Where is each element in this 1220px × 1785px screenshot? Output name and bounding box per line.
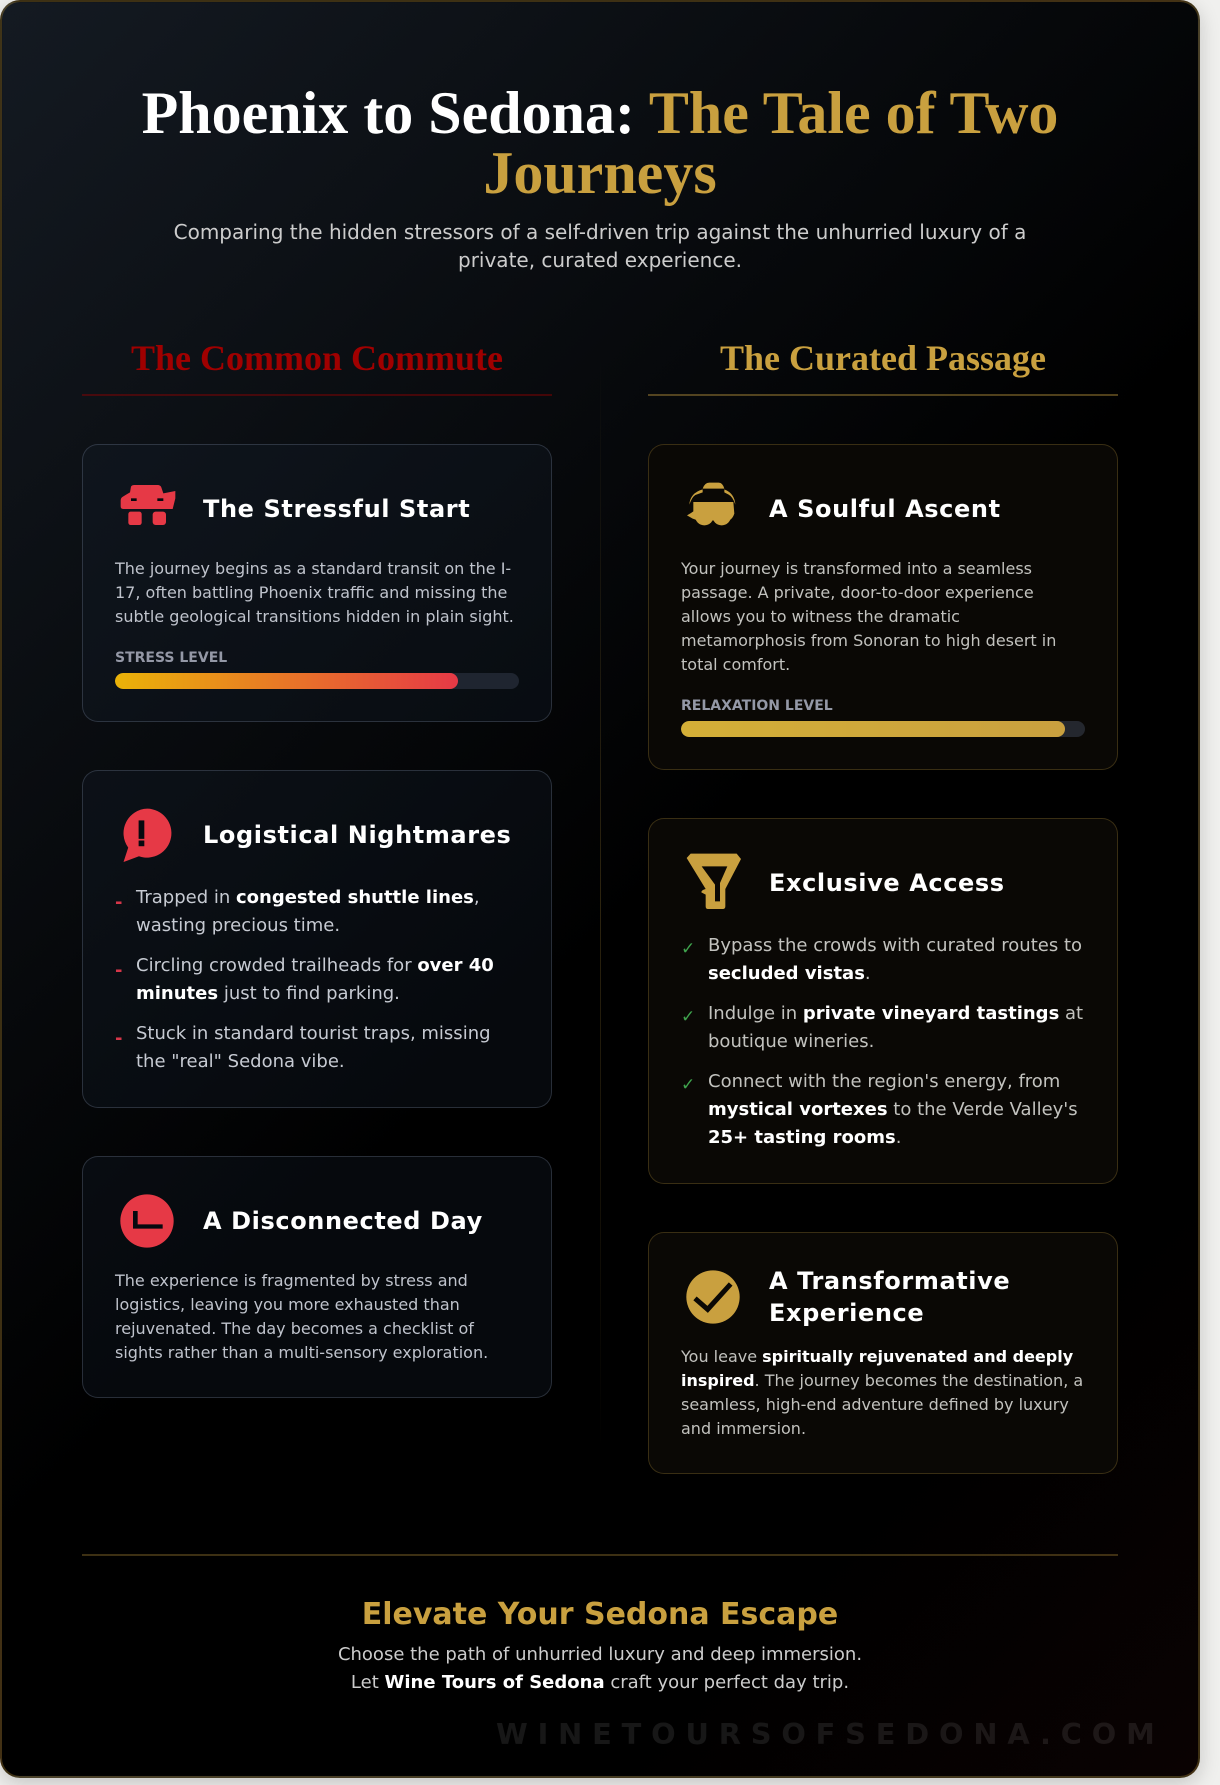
title: Phoenix to Sedona: The Tale of Two <box>142 80 1058 146</box>
card text: and immersion. <box>681 1419 806 1438</box>
card text: The journey begins as a standard transit on the I- <box>115 559 511 578</box>
bullet list: - <box>115 1028 122 1049</box>
check list <box>681 935 1083 1148</box>
card text: You leave spiritually rejuvenated and deeply <box>681 1347 1073 1366</box>
icon: funnel <box>686 854 741 909</box>
relaxation level bar <box>681 721 1085 737</box>
card title: Exclusive Access <box>769 869 1005 897</box>
bullet list: Circling crowded trailheads for over 40 <box>136 955 494 976</box>
check list: ✓ <box>681 1007 695 1027</box>
card text <box>114 1271 488 1362</box>
stress level bar <box>115 673 519 689</box>
column heading: the common commute <box>82 336 552 396</box>
bullet list: minutes just to find parking. <box>136 983 400 1004</box>
icon: clock <box>120 1194 174 1248</box>
check list: boutique wineries. <box>708 1031 874 1052</box>
bullet list: Stuck in standard tourist traps, missing <box>136 1023 491 1044</box>
card title: The Stressful Start <box>203 495 470 523</box>
card text: passage. A private, door-to-door experience <box>681 583 1034 602</box>
card text: seamless, high-end adventure defined by luxury <box>681 1395 1069 1414</box>
icon: car <box>120 485 176 525</box>
title <box>142 80 1058 206</box>
footer heading: Elevate Your Sedona Escape <box>362 1597 838 1632</box>
relaxation level label: RELAXATION LEVEL <box>681 698 833 714</box>
column heading: the common commute: The Common Commute <box>131 338 503 378</box>
card: the stressful start <box>82 444 552 722</box>
card: a disconnected day <box>82 1156 552 1398</box>
watermark: WINETOURSOFSEDONA.COM <box>496 1717 1165 1751</box>
title: Journeys <box>483 140 717 206</box>
card text <box>681 559 1056 674</box>
bullet list: Trapped in congested shuttle lines, <box>136 887 480 908</box>
icon: bus <box>687 482 736 526</box>
footer text: Let Wine Tours of Sedona craft your perfect day trip. <box>351 1672 849 1693</box>
card title <box>769 1267 1010 1327</box>
card text: 17, often battling Phoenix traffic and missing the <box>115 583 507 602</box>
icon: alert speech bubble <box>124 808 172 862</box>
column heading: the curated passage: The Curated Passage <box>720 338 1046 378</box>
card text: metamorphosis from Sonoran to high desert in <box>681 631 1056 650</box>
check list: Bypass the crowds with curated routes to <box>708 935 1082 956</box>
card text: sights rather than a multi-sensory exploration. <box>115 1343 488 1362</box>
bullet list <box>115 887 494 1072</box>
card title: A Transformative <box>769 1267 1010 1295</box>
card text <box>681 1347 1083 1438</box>
column heading: the curated passage <box>648 336 1118 396</box>
card title: A Soulful Ascent <box>769 495 1001 523</box>
card text: rejuvenated. The day becomes a checklist of <box>115 1319 474 1338</box>
bullet list: wasting precious time. <box>136 915 340 936</box>
bullet list: - <box>115 892 122 913</box>
check list: Indulge in private vineyard tastings at <box>708 1003 1083 1024</box>
card text: logistics, leaving you more exhausted than <box>115 1295 460 1314</box>
card text: The experience is fragmented by stress and <box>115 1271 468 1290</box>
card text: inspired. The journey becomes the destination, a <box>681 1371 1083 1390</box>
card text: Your journey is transformed into a seamless <box>681 559 1032 578</box>
card text: total comfort. <box>681 655 790 674</box>
card title: A Disconnected Day <box>203 1207 483 1235</box>
footer text: Choose the path of unhurried luxury and deep immersion. <box>338 1644 862 1665</box>
card: logistical nightmares <box>82 770 552 1108</box>
subtitle <box>174 220 1026 272</box>
card: exclusive access <box>648 818 1118 1184</box>
card text: subtle geological transitions hidden in plain sight. <box>115 607 514 626</box>
card: a transformative experience <box>648 1232 1118 1474</box>
bullet list: - <box>115 960 122 981</box>
subtitle: Comparing the hidden stressors of a self-driven trip against the unhurried luxury of a <box>174 220 1026 244</box>
check list: ✓ <box>681 1075 695 1095</box>
icon: check circle <box>686 1270 740 1324</box>
check list: mystical vortexes to the Verde Valley's <box>708 1099 1078 1120</box>
card text: allows you to witness the dramatic <box>681 607 960 626</box>
subtitle: private, curated experience. <box>458 248 742 272</box>
card title: Logistical Nightmares <box>203 821 511 849</box>
stress level label: STRESS LEVEL <box>115 650 227 666</box>
card title: Experience <box>769 1299 924 1327</box>
footer text <box>338 1644 862 1693</box>
check list: 25+ tasting rooms. <box>708 1127 901 1148</box>
bullet list: the "real" Sedona vibe. <box>136 1051 345 1072</box>
card text <box>114 559 514 626</box>
check list: ✓ <box>681 939 695 959</box>
check list: secluded vistas. <box>708 963 871 984</box>
check list: Connect with the region's energy, from <box>708 1071 1060 1092</box>
card: a soulful ascent <box>648 444 1118 770</box>
